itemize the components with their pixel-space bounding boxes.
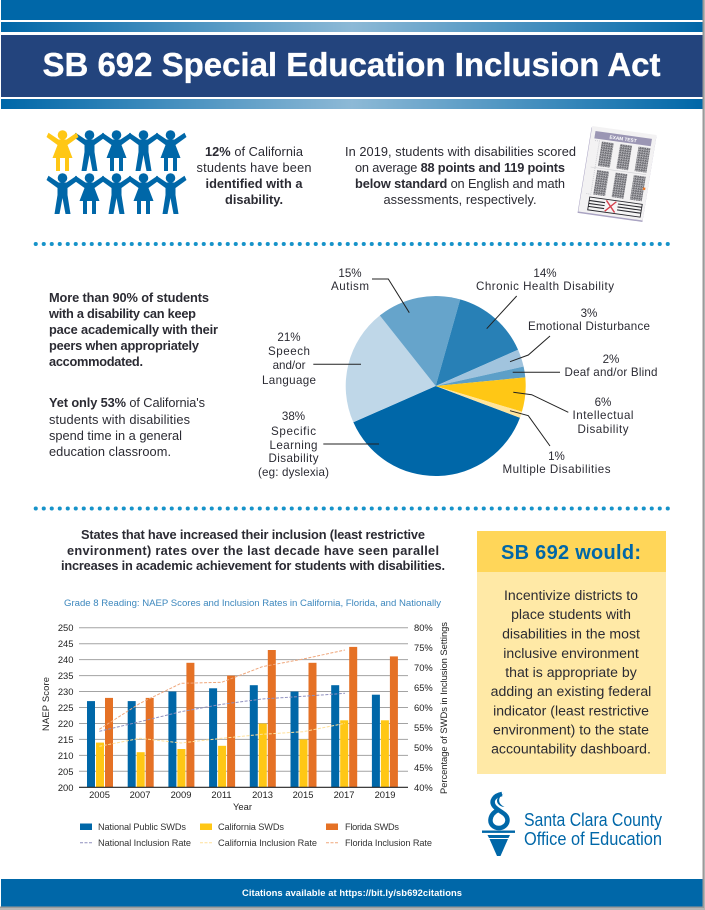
text: accommodation claim: with a disability can keep bbox=[48, 306, 196, 321]
x axis labels: 2005 bbox=[89, 789, 110, 800]
right axis labels: 70% bbox=[414, 662, 433, 673]
pie label: emotional disturbance: 3% bbox=[581, 307, 597, 320]
pie label: autism: 15% bbox=[338, 267, 362, 280]
text: 12 percent identified: students have been bbox=[196, 160, 312, 175]
pie label: specific learning disability: Learning bbox=[270, 439, 318, 452]
pie label: emotional disturbance: Emotional Disturbance bbox=[528, 320, 650, 333]
pie label: multiple disabilities: Multiple Disabilities bbox=[502, 463, 611, 476]
right axis labels: 50% bbox=[414, 742, 433, 753]
text: 12 percent identified: 12% of California bbox=[205, 144, 304, 159]
chart title: Grade 8 Reading: NAEP Scores and Inclusion Rates in California, Florida, and Nationally bbox=[64, 598, 441, 609]
left axis labels: 240 bbox=[58, 654, 74, 665]
pie label: specific learning disability: (eg: dyslexia) bbox=[258, 466, 329, 479]
left axis labels: 200 bbox=[58, 782, 74, 793]
chart heading bbox=[61, 527, 445, 573]
chart legend: California SWDs bbox=[218, 822, 284, 832]
x axis labels: 2011 bbox=[211, 789, 232, 800]
pie label: intellectual disability: Intellectual bbox=[572, 409, 634, 422]
pie label: speech and language: Language bbox=[262, 374, 316, 387]
inclusion rate trend lines bbox=[99, 650, 345, 746]
right axis labels: 65% bbox=[414, 682, 433, 693]
axis titles bbox=[40, 622, 449, 812]
pie label: multiple disabilities: 1% bbox=[548, 450, 565, 463]
title: SB 692 Special Education Inclusion Act bbox=[42, 46, 661, 83]
x axis labels bbox=[89, 789, 395, 800]
text: 53 percent in general classroom: Yet only 53% of California's bbox=[49, 395, 205, 410]
text: accommodation claim: peers when appropriately bbox=[49, 338, 200, 353]
left axis labels: 225 bbox=[58, 702, 74, 713]
right axis labels: 75% bbox=[414, 642, 433, 653]
left axis labels: 230 bbox=[58, 686, 74, 697]
right axis labels: 60% bbox=[414, 702, 433, 713]
pie label: multiple disabilities bbox=[502, 450, 611, 476]
chart: NAEP scores and inclusion rates bbox=[40, 598, 449, 848]
pie label: emotional disturbance bbox=[528, 307, 650, 333]
pie label: deaf and blind: 2% bbox=[603, 353, 619, 366]
pie label: speech and language: 21% bbox=[277, 331, 301, 344]
pie label: specific learning disability: Specific bbox=[271, 425, 316, 438]
divider: top dotted line bbox=[36, 242, 673, 246]
pie label: autism: Autism bbox=[331, 280, 369, 293]
logo: Santa Clara County Office of Education bbox=[482, 794, 662, 856]
citation text: Citations available at https://bit.ly/sb692citations bbox=[242, 887, 462, 898]
pie label: chronic health bbox=[476, 267, 614, 293]
pie label: speech and language bbox=[262, 331, 316, 387]
right axis labels: 80% bbox=[414, 622, 433, 633]
icon: torch bbox=[482, 794, 515, 856]
panel body text: inclusive environment bbox=[503, 645, 639, 661]
text: 53 percent in general classroom: education classroom. bbox=[49, 444, 171, 459]
text: accommodation claim: accommodated. bbox=[49, 354, 143, 369]
chart heading: increases in academic achievement for students with disabilities. bbox=[61, 558, 445, 573]
text: 2019 test scores: assessments, respectively. bbox=[384, 192, 536, 207]
text: accommodation claim: More than 90% of students bbox=[49, 290, 209, 305]
chart legend: Florida Inclusion Rate bbox=[345, 838, 432, 848]
x axis labels: 2019 bbox=[375, 789, 395, 800]
text: 2019 test scores: below standard on English and math bbox=[355, 176, 565, 191]
pie label: deaf and blind bbox=[564, 353, 658, 379]
panel body text: environment) to the state bbox=[493, 722, 649, 738]
panel: SB 692 would bbox=[477, 531, 666, 774]
text: 2019 test scores: In 2019, students with disabilities scored bbox=[345, 144, 576, 159]
panel body text bbox=[491, 587, 651, 756]
chart legend: Florida SWDs bbox=[345, 822, 399, 832]
right axis labels: 40% bbox=[414, 782, 433, 793]
panel body text: accountability dashboard. bbox=[491, 740, 651, 756]
California bars bbox=[96, 720, 389, 787]
pie label: deaf and blind: Deaf and/or Blind bbox=[564, 366, 658, 379]
national bars bbox=[87, 685, 380, 787]
icon: exam test sheet bbox=[578, 126, 657, 222]
divider: lower dotted line bbox=[36, 506, 673, 510]
chart heading: environment) rates over the last decade have seen parallel bbox=[67, 543, 439, 558]
text: 2019 test scores bbox=[345, 144, 576, 207]
text: accommodation claim: pace academically with their bbox=[49, 322, 218, 337]
icon: row of people, one in ten highlighted bbox=[46, 130, 186, 214]
icon: exam test sheet: EXAM TEST bbox=[609, 135, 637, 144]
axis titles: Year bbox=[233, 801, 252, 812]
pie label: specific learning disability: 38% bbox=[282, 410, 305, 423]
pie label: specific learning disability: Disability bbox=[268, 452, 319, 465]
left axis labels: 210 bbox=[58, 750, 74, 761]
chart legend: National Inclusion Rate bbox=[98, 838, 191, 848]
x axis labels: 2017 bbox=[334, 789, 354, 800]
panel body text: adding an existing federal bbox=[491, 683, 651, 699]
left axis labels: 245 bbox=[58, 638, 74, 649]
pie label: chronic health: Chronic Health Disability bbox=[476, 280, 614, 293]
chart heading: States that have increased their inclusion (least restrictive bbox=[81, 527, 425, 542]
left axis labels: 235 bbox=[58, 670, 74, 681]
pie label: speech and language: Speech bbox=[268, 345, 310, 358]
text: 12 percent identified: disability. bbox=[225, 192, 283, 207]
chart legend: California Inclusion Rate bbox=[218, 838, 317, 848]
pie label: intellectual disability: 6% bbox=[595, 396, 611, 409]
axis titles: Percentage of SWDs in Inclusion Settings bbox=[438, 622, 449, 794]
text: 2019 test scores: on average 88 points and 119 points bbox=[355, 160, 565, 175]
x axis labels: 2007 bbox=[130, 789, 150, 800]
panel heading: SB 692 would: bbox=[501, 542, 641, 564]
pie label: intellectual disability bbox=[572, 396, 634, 436]
panel body text: indicator (least restrictive bbox=[493, 702, 649, 718]
axis titles: NAEP Score bbox=[40, 677, 51, 731]
logo: Santa Clara County Office of Education: Office of Education bbox=[524, 829, 662, 849]
pie label: autism bbox=[331, 267, 369, 293]
text: 12 percent identified bbox=[196, 144, 312, 207]
pie label: specific learning disability bbox=[258, 410, 329, 479]
x axis labels: 2015 bbox=[293, 789, 313, 800]
left axis labels: 250 bbox=[58, 622, 74, 633]
left axis labels: 220 bbox=[58, 718, 74, 729]
x axis labels: 2009 bbox=[171, 789, 191, 800]
right axis labels: 55% bbox=[414, 722, 433, 733]
left axis labels bbox=[58, 622, 74, 793]
pie label: chronic health: 14% bbox=[533, 267, 557, 280]
left axis labels: 205 bbox=[58, 766, 74, 777]
text: accommodation claim bbox=[48, 290, 218, 369]
pie label: intellectual disability: Disability bbox=[578, 423, 629, 436]
panel body text: Incentivize districts to bbox=[504, 587, 638, 603]
right axis labels: 45% bbox=[414, 762, 433, 773]
left axis labels: 215 bbox=[58, 734, 74, 745]
logo: Santa Clara County Office of Education: Santa Clara County bbox=[524, 810, 662, 830]
pie leader lines bbox=[313, 279, 568, 446]
x axis labels: 2013 bbox=[252, 789, 273, 800]
panel body text: place students with bbox=[511, 606, 631, 622]
chart legend bbox=[80, 822, 432, 848]
header banner bbox=[1, 0, 703, 109]
right axis labels bbox=[414, 622, 433, 793]
text: 53 percent in general classroom bbox=[49, 395, 205, 459]
pie label: speech and language: and/or bbox=[273, 359, 306, 372]
Florida bars bbox=[105, 647, 398, 787]
panel body text: disabilities in the most bbox=[502, 626, 640, 642]
text: 53 percent in general classroom: spend time in a general bbox=[49, 428, 182, 443]
text: 53 percent in general classroom: students with disabilities bbox=[49, 412, 190, 427]
chart legend: National Public SWDs bbox=[98, 822, 186, 832]
footer bar bbox=[1, 879, 703, 907]
text: 12 percent identified: identified with a bbox=[206, 176, 303, 191]
panel body text: that is appropriate by bbox=[505, 664, 638, 680]
pie chart: disability categories bbox=[258, 267, 658, 479]
